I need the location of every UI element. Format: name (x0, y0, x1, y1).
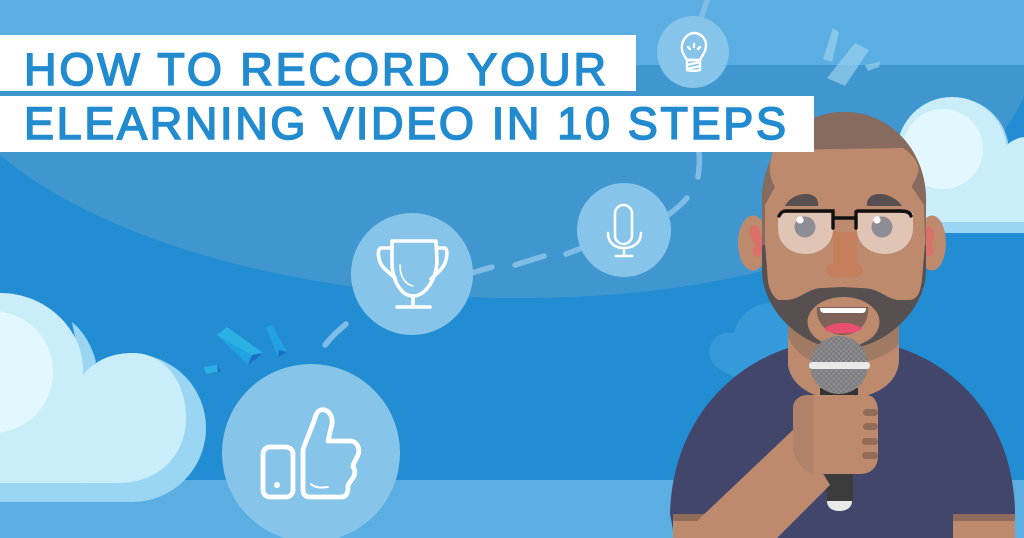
glasses (778, 211, 913, 254)
hair (762, 112, 926, 245)
icon: trophy in circle (351, 213, 473, 335)
mouth area skin (808, 297, 880, 347)
microphone (809, 336, 870, 511)
dashed path connecting the icons (325, 0, 708, 345)
neck (788, 320, 899, 395)
icon: microphone in circle (577, 183, 671, 277)
presenter (670, 112, 1015, 538)
title banner (0, 35, 814, 152)
right sleeve and arm (953, 514, 1015, 538)
icon: thumbs-up and phone in circle (222, 364, 400, 538)
neck shadow (788, 325, 899, 362)
icon: lightbulb in circle (657, 16, 729, 88)
faint cloud behind presenter (709, 303, 800, 380)
pale shards near lightbulb (823, 28, 880, 86)
face skin (765, 148, 925, 300)
ear right (918, 216, 946, 270)
arm (673, 428, 830, 538)
eyebrows (785, 194, 902, 206)
left cloud (0, 293, 206, 502)
left sleeve cuff (673, 514, 707, 521)
title line 1: HOW TO RECORD YOUR (24, 44, 606, 95)
shards near thumbs-up (204, 325, 287, 374)
mouth (817, 307, 868, 335)
shirt (670, 348, 1015, 538)
title line 2: ELEARNING VIDEO IN 10 STEPS (24, 98, 786, 149)
ear left (738, 216, 768, 270)
beard base and head outline (762, 112, 926, 349)
right cloud (897, 97, 1024, 233)
nose (827, 232, 863, 278)
hand (793, 395, 878, 474)
